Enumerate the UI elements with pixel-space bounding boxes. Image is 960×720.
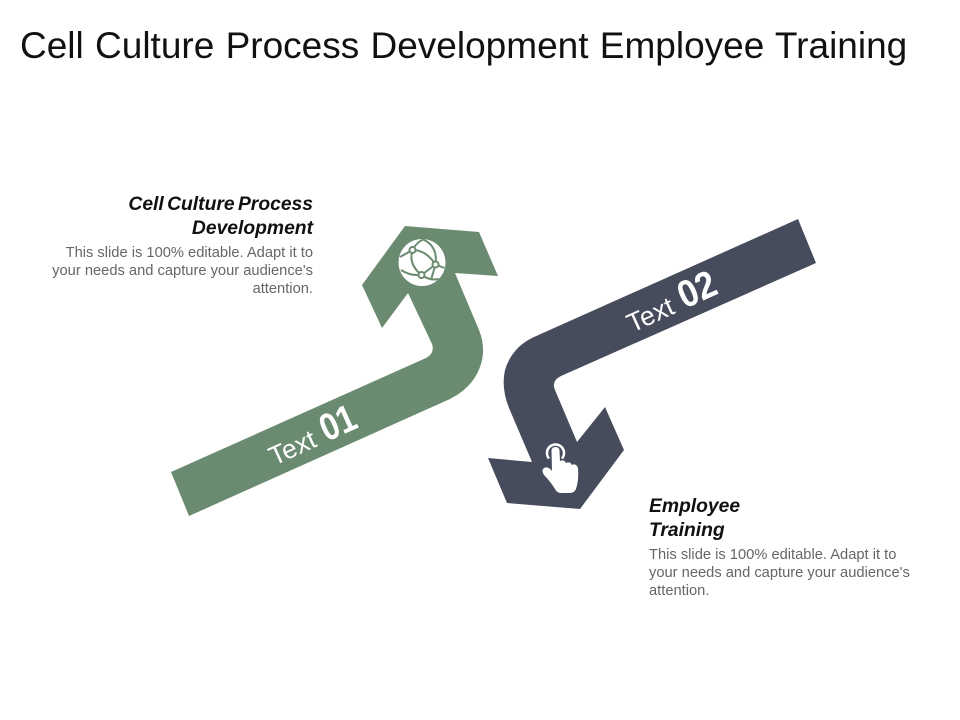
description: right block xyxy=(649,547,910,599)
label: text 01: Text xyxy=(264,424,321,471)
green arrow xyxy=(171,226,498,516)
dark arrow xyxy=(488,219,816,509)
text block: cell culture process development xyxy=(52,194,314,297)
heading: employee training xyxy=(649,496,740,541)
description: left block: your needs and capture your audience's xyxy=(52,263,313,279)
description: right block: attention. xyxy=(649,583,709,599)
title: Cell Culture Process Development Employee Training xyxy=(20,25,907,66)
heading: cell culture process development xyxy=(128,194,314,239)
label: text 02: Text xyxy=(622,291,679,338)
heading: employee training: Training xyxy=(649,520,725,541)
description: right block: your needs and capture your audience's xyxy=(649,565,910,581)
label: text 02: 02 xyxy=(670,262,723,317)
icon: globe network xyxy=(398,239,446,286)
heading: employee training: Employee xyxy=(649,496,740,517)
description: left block: This slide is 100% editable. Adapt it to xyxy=(66,245,313,261)
icon: pointing hand xyxy=(542,445,578,493)
heading: cell culture process development: Cell Culture Process xyxy=(128,194,313,215)
description: left block xyxy=(52,245,313,297)
description: right block: This slide is 100% editable. Adapt it to xyxy=(649,547,896,563)
description: left block: attention. xyxy=(253,281,313,297)
label: text 02 xyxy=(618,262,723,341)
label: text 01 xyxy=(260,397,363,474)
label: text 01: 01 xyxy=(313,397,363,450)
text block: employee training xyxy=(649,496,910,599)
heading: cell culture process development: Development xyxy=(192,218,313,239)
